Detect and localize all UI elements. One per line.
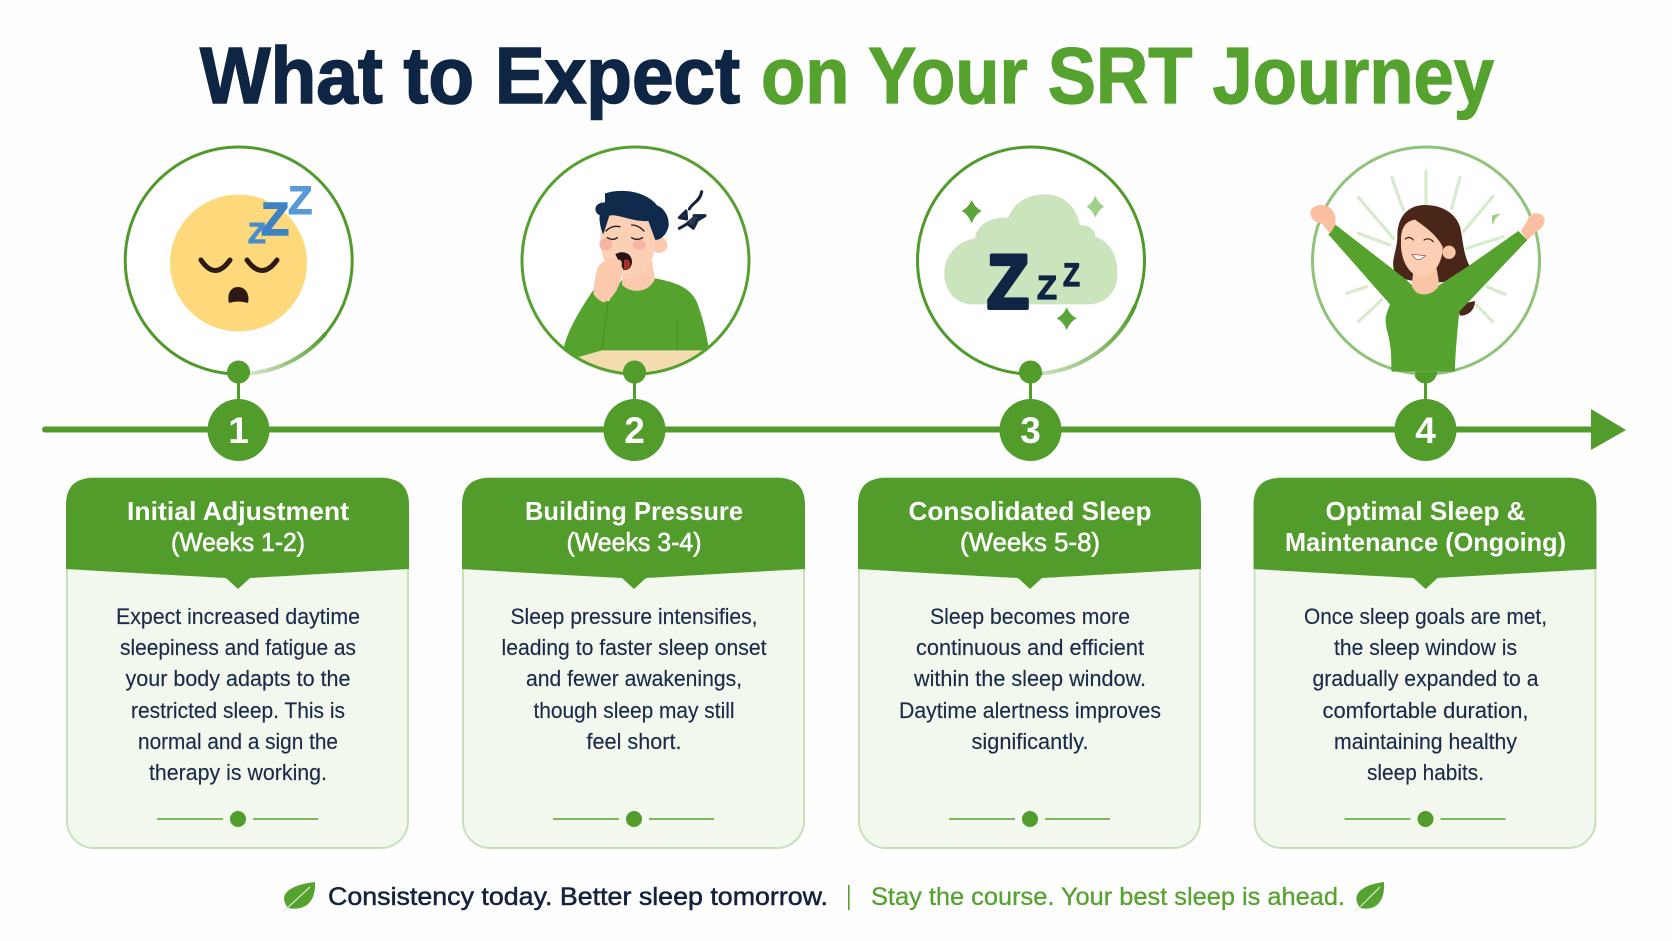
step 4 header: Optimal Sleep & [1326,496,1526,526]
step 3 description: continuous and efficient [916,635,1144,660]
step 2 description: Sleep pressure intensifies, [510,604,758,629]
icon: left leaf [284,882,315,911]
step 4 header [1254,478,1596,589]
step 4 description: Once sleep goals are met, [1304,604,1547,629]
step 2 description: and fewer awakenings, [526,666,742,691]
step 2 header [462,478,805,589]
step 2 description: though sleep may still [534,698,734,723]
step 1 header: Initial Adjustment [127,496,349,526]
step 2 header: Building Pressure [525,496,743,526]
step 2 description: leading to faster sleep onset [502,635,766,660]
icon: sleepy face [125,147,352,384]
step 1 header [66,478,409,589]
step 1 header: (Weeks 1-2) [171,527,305,557]
step 3 marker: 3 [1020,410,1041,451]
step 3 description: significantly. [972,729,1088,754]
step 4 description: maintaining healthy [1334,729,1517,754]
step 3 header [858,478,1201,589]
step 2 marker [604,360,666,461]
step 3 description: Sleep becomes more [930,604,1130,629]
step 2 header: (Weeks 3-4) [566,527,702,557]
step 1 description: therapy is working. [149,760,327,785]
icon: sleepy face: Z [288,179,312,223]
step 4 description: the sleep window is [1334,635,1517,660]
icon: sleepy face: Z [261,193,289,245]
step 1 description: sleepiness and fatigue as [120,635,356,660]
title: What to Expect [200,31,740,120]
footer tagline: Stay the course. Your best sleep is ahead. [871,883,1345,911]
step 2 description: feel short. [586,729,682,754]
step 4 description: sleep habits. [1367,760,1484,785]
step 2 description [502,604,766,754]
panel: step 2 card [462,478,805,848]
step 1 ornament [157,811,318,827]
step 1 description [116,604,360,785]
step 1 marker [208,360,270,461]
step 3 ornament [949,811,1110,827]
title: on Your SRT Journey [761,31,1494,120]
step 1 description: restricted sleep. This is [131,698,345,723]
footer tagline: Consistency today. Better sleep tomorrow. [328,883,828,911]
step 3 description: within the sleep window. [913,666,1146,691]
icon: yawning man [522,147,749,384]
icon: cloud with Zzz: Z [1037,269,1057,306]
icon: happy woman stretching [1310,147,1545,383]
step 1 description: normal and a sign the [138,729,338,754]
step 2 ornament [553,811,714,827]
step 4 marker [1394,360,1456,461]
icon: sleepy face: Z [248,218,266,250]
icon: cloud with Zzz: Z [1063,257,1080,293]
step 3 description: Daytime alertness improves [899,698,1161,723]
icon: right leaf [1356,882,1384,911]
timeline arrow [42,409,1626,450]
step 4 description: gradually expanded to a [1312,666,1539,691]
step 3 marker [1000,360,1062,461]
step 3 description [899,604,1161,754]
step 1 description: your body adapts to the [126,666,350,691]
step 4 description [1304,604,1547,785]
step 4 ornament [1344,811,1506,827]
step 1 marker: 1 [228,410,249,451]
icon: cloud with Zzz [918,147,1144,384]
step 2 marker: 2 [624,410,645,451]
step 4 header: Maintenance (Ongoing) [1285,527,1566,557]
panel: step 3 card [858,478,1201,848]
icon: cloud with Zzz: Z [987,240,1029,325]
panel: step 4 card [1254,478,1596,848]
step 3 header: Consolidated Sleep [908,496,1152,526]
title [200,31,1494,120]
step 3 header: (Weeks 5-8) [960,527,1100,557]
footer tagline [284,882,1384,911]
panel: step 1 card [66,478,409,848]
step 1 description: Expect increased daytime [116,604,360,629]
step 4 marker: 4 [1415,410,1436,451]
step 4 description: comfortable duration, [1322,698,1528,723]
